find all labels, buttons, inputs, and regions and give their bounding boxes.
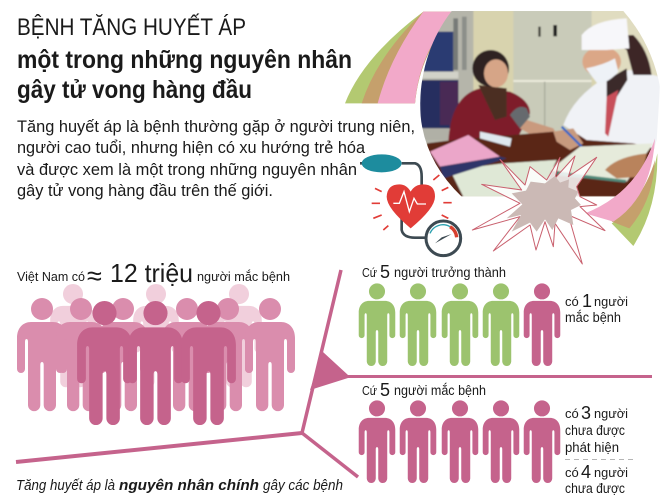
branching connector bbox=[16, 270, 652, 477]
callout: 4 untreated: có bbox=[565, 465, 579, 480]
callout: 4 untreated: 4 bbox=[581, 462, 591, 482]
bottom caption: nguyên nhân chính bbox=[119, 477, 259, 494]
callout: 4 untreated: chưa được bbox=[565, 481, 625, 496]
patient bbox=[448, 88, 530, 147]
title: BỆNH TĂNG HUYẾT ÁP bbox=[17, 13, 246, 41]
callout: 3 undetected: người bbox=[594, 406, 628, 421]
row: patients heading bbox=[362, 380, 486, 400]
headline: 12 million: Việt Nam có bbox=[17, 269, 85, 284]
bottom caption: gây các bệnh bbox=[263, 477, 343, 494]
decorative arcs: upper left of photo bbox=[345, 12, 458, 103]
nurse bbox=[563, 70, 660, 150]
callout: 1 in 5: người bbox=[594, 294, 628, 309]
row: adults heading: người trưởng thành bbox=[394, 265, 506, 280]
callout: 3 undetected: chưa được bbox=[565, 423, 625, 438]
title: một trong những nguyên nhân bbox=[17, 46, 352, 74]
burst shape bbox=[472, 156, 605, 264]
callout: 1 in 5: mắc bệnh bbox=[565, 310, 621, 325]
callout: 1 in 5: 1 bbox=[582, 291, 592, 311]
row: patients heading: 5 bbox=[380, 380, 390, 400]
callout: 4 untreated: người bbox=[594, 465, 628, 480]
title: gây tử vong hàng đầu bbox=[17, 76, 252, 104]
headline: 12 million: người mắc bệnh bbox=[197, 269, 290, 284]
row: adults heading bbox=[362, 262, 506, 282]
intro text block: gây tử vong hàng đầu trên thế giới. bbox=[17, 181, 273, 200]
bottom caption bbox=[16, 477, 343, 494]
callout: 1 in 5 bbox=[565, 291, 628, 325]
row: adults heading: 5 bbox=[380, 262, 390, 282]
title bbox=[17, 13, 352, 104]
icon: blood pressure heart and gauge bbox=[360, 154, 461, 256]
headline: 12 million: 12 triệu bbox=[110, 258, 193, 288]
callout: 4 untreated bbox=[565, 462, 628, 496]
intro text block: và được xem là một trong những nguyên nhân bbox=[17, 160, 357, 179]
crowd of people bbox=[17, 284, 295, 425]
front row bbox=[77, 301, 236, 425]
row: patients heading: người mắc bệnh bbox=[394, 383, 486, 398]
decorative arcs: lower right of photo bbox=[585, 138, 657, 246]
headline: 12 million bbox=[17, 258, 290, 291]
shelf bbox=[420, 10, 473, 143]
photo: patient and nurse bbox=[420, 10, 660, 197]
table bbox=[427, 132, 660, 197]
intro text block: Tăng huyết áp là bệnh thường gặp ở người trung niên, bbox=[17, 117, 415, 136]
callout: 3 undetected: phát hiện bbox=[565, 440, 619, 455]
intro text block bbox=[17, 117, 415, 200]
middle row bbox=[17, 298, 295, 411]
callout: 3 undetected: có bbox=[565, 406, 579, 421]
intro text block: người cao tuổi, nhưng hiện có xu hướng trẻ hóa bbox=[17, 138, 366, 157]
headline: 12 million: ≈ bbox=[87, 261, 102, 291]
callout: 3 undetected bbox=[565, 403, 628, 455]
desk papers bbox=[450, 160, 557, 197]
row: 5 patients pictogram bbox=[359, 400, 560, 483]
bottom caption: Tăng huyết áp là bbox=[16, 477, 115, 494]
row: patients heading: Cứ bbox=[362, 383, 377, 398]
back row bbox=[50, 284, 262, 387]
callout: 1 in 5: có bbox=[565, 294, 579, 309]
row: 5 adults pictogram bbox=[359, 283, 560, 366]
callout: 3 undetected: 3 bbox=[581, 403, 591, 423]
row: adults heading: Cứ bbox=[362, 265, 377, 280]
